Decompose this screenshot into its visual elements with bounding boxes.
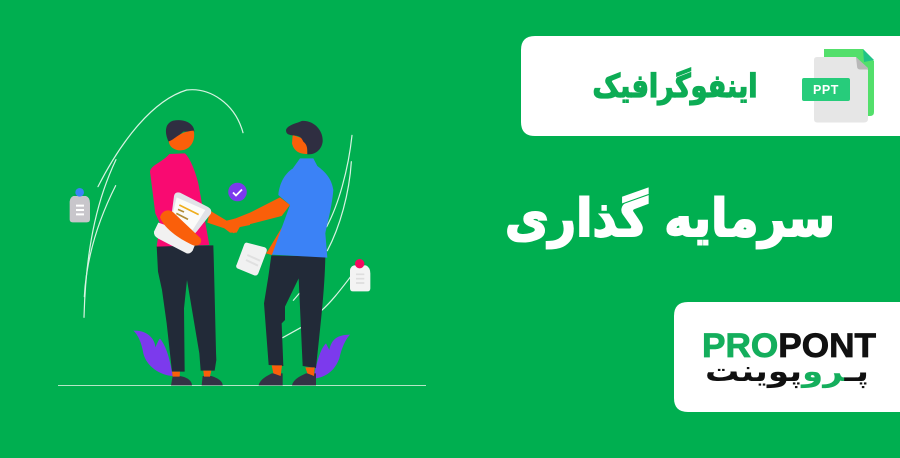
- left forearm: [160, 210, 201, 246]
- icon: PPT file: [802, 49, 874, 122]
- heading: infographic: اینفوگرافیک: [592, 67, 758, 105]
- right arm: [207, 211, 250, 233]
- paper: [236, 243, 267, 276]
- torso pink: [150, 153, 209, 247]
- ground line: [58, 384, 426, 386]
- decorative curved lines right: [283, 135, 352, 338]
- book text lines: [179, 205, 199, 215]
- head: [169, 131, 194, 150]
- hair: [166, 120, 194, 143]
- icon: check badge: [228, 183, 247, 201]
- front arm: [220, 197, 290, 233]
- plant right: [313, 335, 350, 379]
- face: [292, 135, 307, 154]
- back arm: [266, 225, 283, 255]
- shoes: [259, 373, 283, 385]
- legs: [264, 255, 325, 368]
- panel: infographic label: [521, 36, 900, 136]
- icon: PPT file: PPT: [813, 83, 839, 97]
- legs: [157, 245, 216, 372]
- person right: [220, 121, 333, 385]
- logo latin: PROPONT: [702, 327, 876, 365]
- decorative curved lines left: [84, 90, 243, 317]
- logo persian: پـروپوینت: [705, 354, 869, 389]
- panel: logo: [674, 302, 900, 412]
- title: سرمایه گذاری: [505, 188, 835, 249]
- illustration: handshake: [58, 90, 426, 386]
- torso blue: [272, 158, 333, 258]
- person left: [150, 120, 250, 385]
- hair: [286, 121, 323, 154]
- shoes: [171, 376, 192, 385]
- icon: clipboard left: [70, 188, 90, 222]
- plant left: [133, 331, 173, 376]
- book: [154, 223, 198, 254]
- icon: clipboard right: [350, 259, 370, 291]
